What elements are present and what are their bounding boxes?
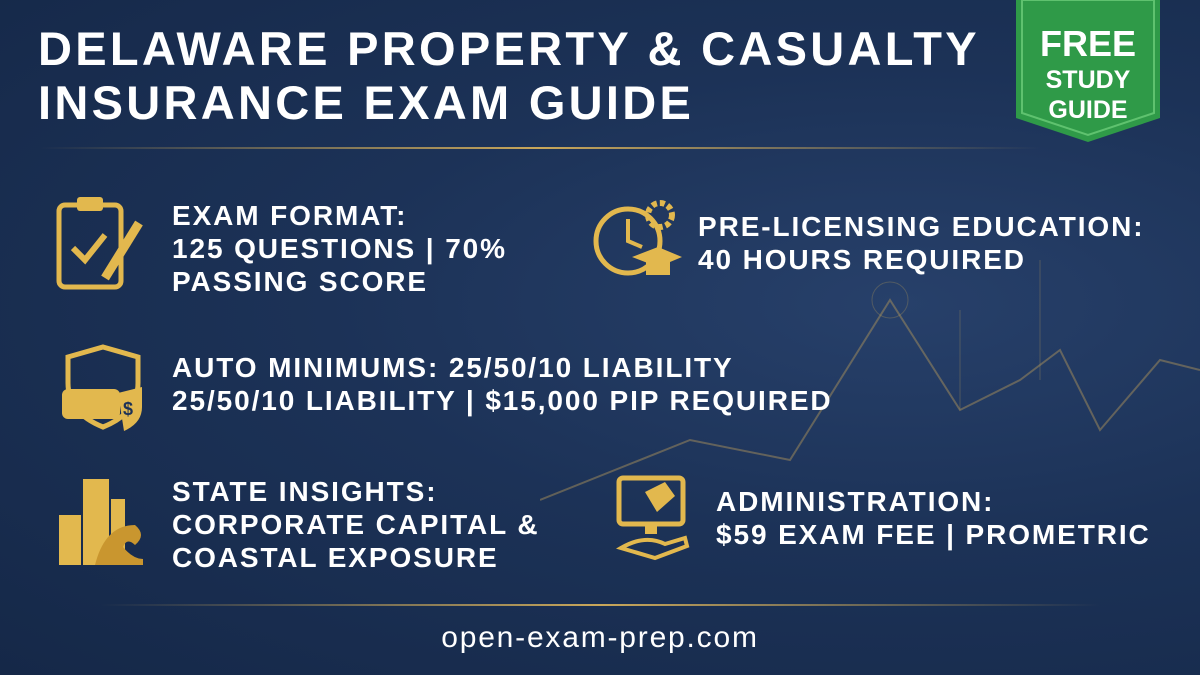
- icon: buildings wave: [59, 479, 143, 565]
- text: administration: [716, 486, 1151, 550]
- text: exam format: [172, 200, 507, 297]
- badge: free study guide: GUIDE: [1048, 96, 1128, 124]
- text: pre-licensing: 40 HOURS REQUIRED: [698, 244, 1026, 275]
- text: auto minimums: 25/50/10 LIABILITY | $15,000 PIP REQUIRED: [172, 385, 833, 416]
- footer url: open-exam-prep.com: [441, 621, 759, 654]
- text: administration: $59 EXAM FEE | PROMETRIC: [716, 519, 1151, 550]
- text: exam format: EXAM FORMAT:: [172, 200, 407, 231]
- icon: monitor price tag: [616, 476, 690, 560]
- title: INSURANCE EXAM GUIDE: [38, 76, 694, 129]
- text: pre-licensing: PRE-LICENSING EDUCATION:: [698, 211, 1144, 242]
- text: administration: ADMINISTRATION:: [716, 486, 994, 517]
- badge: free study guide: STUDY: [1046, 66, 1131, 94]
- title: [38, 22, 980, 129]
- text: state insights: CORPORATE CAPITAL &: [172, 509, 539, 540]
- icon: clock graduation: [594, 200, 682, 276]
- text: exam format: 125 QUESTIONS | 70%: [172, 233, 507, 264]
- text: auto minimums: [172, 352, 833, 416]
- icon: car shield: $: [123, 399, 133, 419]
- text: state insights: [172, 476, 539, 573]
- text: auto minimums: AUTO MINIMUMS: 25/50/10 LIABILITY: [172, 352, 734, 383]
- icon: clipboard: [56, 197, 143, 290]
- badge: free study guide: [1016, 0, 1160, 142]
- badge: free study guide: FREE: [1040, 23, 1136, 64]
- icon: car shield: [62, 344, 142, 431]
- background chart decoration: [540, 260, 1200, 501]
- title: DELAWARE PROPERTY & CASUALTY: [38, 22, 980, 75]
- text: exam format: PASSING SCORE: [172, 266, 428, 297]
- text: state insights: STATE INSIGHTS:: [172, 476, 437, 507]
- text: pre-licensing: [698, 211, 1144, 275]
- text: state insights: COASTAL EXPOSURE: [172, 542, 499, 573]
